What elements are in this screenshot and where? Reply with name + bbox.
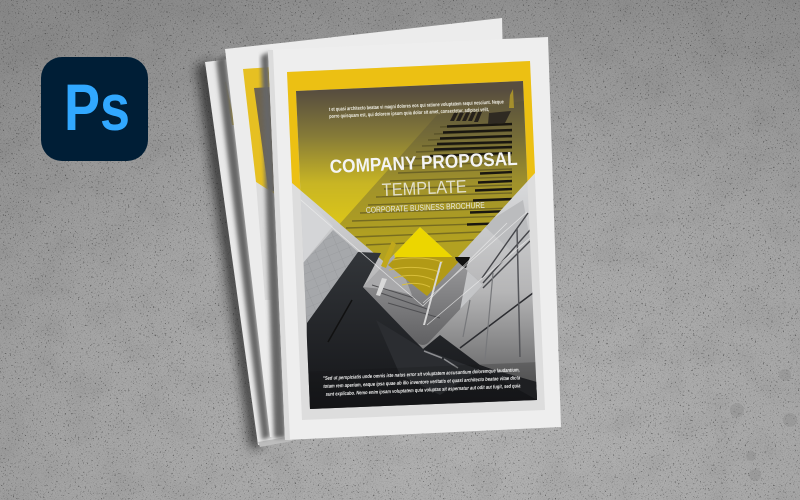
- inner grey margin: [287, 61, 545, 420]
- cover quote: [323, 367, 521, 398]
- middle page lower panel: [256, 182, 280, 300]
- middle page yellow cover panel: [243, 67, 276, 195]
- skyscraper: [340, 101, 528, 261]
- spine highlight: [268, 50, 290, 440]
- icon: Photoshop logo: [41, 57, 148, 161]
- white construction lines: [294, 194, 530, 325]
- grey left wall: [303, 230, 358, 323]
- cover quote: "Sed ut perspiciatis unde omnis iste natus error sit voluptatem accusantium doloremque laudantium,: [323, 367, 520, 382]
- back brochure page: [205, 52, 292, 447]
- dark foreground structure: [305, 252, 540, 412]
- upper left facet: [363, 252, 412, 295]
- cover tagline: CORPORATE BUSINESS BROCHURE: [366, 200, 485, 215]
- yellow chevron panel: [287, 61, 535, 295]
- light left triangle: [302, 220, 332, 262]
- spike: [381, 241, 396, 268]
- cover quote: totam rem aperiam, eaque ipsa quae ab illo inventore veritatis et quasi architecto beatae vitae dicta: [323, 375, 520, 390]
- bottom gradient shade: [308, 362, 536, 409]
- shadow band from front page: [261, 52, 286, 438]
- bright yellow diamond: [394, 227, 454, 258]
- rooftop slats: [450, 111, 511, 124]
- cover title: COMPANY PROPOSAL: [329, 149, 518, 178]
- glass facade: [290, 80, 540, 410]
- yellow gradient chevron: [296, 81, 528, 261]
- rooftop spire: [509, 89, 514, 108]
- cover top copy: t et quasi architecto beatae vi magni dolores eos qui ratione voluptatem sequi nesciunt. Neque: [329, 99, 504, 113]
- white vertical strut: [423, 262, 442, 325]
- window frame lines: [460, 213, 533, 360]
- cover quote: sunt explicabo. Nemo enim ipsam voluptatem quia voluptas sit aspernatur aut odit aut fugit, sed quia: [326, 383, 521, 398]
- icon: Photoshop logo: Ps: [64, 70, 130, 144]
- dark structure facets: [328, 300, 537, 400]
- cover subtitle: TEMPLATE: [381, 176, 467, 200]
- rotated square window: [360, 225, 485, 350]
- shadow under brochure stack: [196, 60, 262, 448]
- olive building: [388, 257, 463, 296]
- cover photo: [296, 81, 537, 409]
- cover top copy: [329, 99, 504, 120]
- cover top copy: porro quisquam est, qui dolorem ipsum quia dolor sit amet, consectetur, adipisci velit,: [329, 107, 490, 120]
- front brochure page: [268, 37, 561, 440]
- light corner facet: [460, 268, 483, 310]
- shadow band from middle page: [216, 54, 270, 440]
- middle page cover image: [254, 87, 275, 192]
- building band top right of chevron: [483, 200, 530, 250]
- middle brochure page: [225, 18, 503, 438]
